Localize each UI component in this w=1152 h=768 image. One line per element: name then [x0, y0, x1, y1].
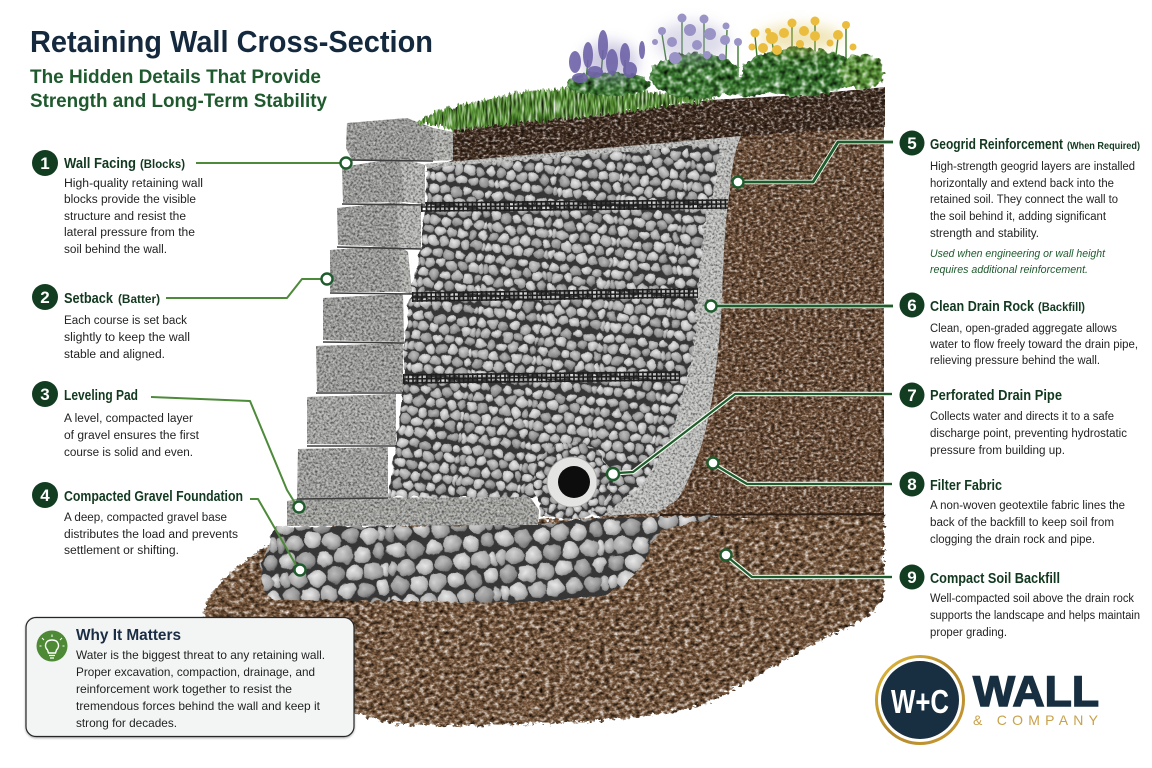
body text 1: structure and resist the — [64, 211, 186, 223]
body text 8: back of the backfill to keep soil from — [930, 517, 1114, 529]
heading 3: Leveling Pad — [64, 388, 138, 404]
number badge 8 — [900, 472, 924, 496]
body text 2 — [64, 315, 190, 361]
number badge 4 — [32, 482, 58, 508]
clean drain rock backfill — [388, 144, 720, 516]
panel body text: tremendous forces behind the wall and keep it — [76, 699, 321, 713]
subtitle: The Hidden Details That Provide — [30, 66, 321, 88]
body text 8: clogging the drain rock and pipe. — [930, 534, 1095, 546]
body text 2: stable and aligned. — [64, 349, 165, 361]
leader line 8 — [708, 458, 892, 484]
foliage — [566, 48, 884, 99]
leader line 3 — [151, 397, 304, 512]
callout 9: compact soil backfill — [720, 550, 1140, 639]
leader line 9 — [720, 550, 892, 577]
leader line 2 — [166, 274, 332, 298]
panel body text: reinforcement work together to resist the — [76, 682, 292, 696]
heading 2: Setback — [64, 291, 114, 307]
flowers: lavender blooms — [652, 14, 742, 64]
body text 6: Clean, open-graded aggregate allows — [930, 323, 1117, 335]
number badge 5: 5 — [907, 134, 917, 153]
subtitle: Strength and Long-Term Stability — [30, 90, 327, 112]
title: Retaining Wall Cross-Section — [30, 24, 433, 59]
geogrid layers — [403, 200, 728, 383]
panel heading: Why It Matters — [76, 627, 181, 644]
panel background — [26, 618, 354, 736]
heading 5: Geogrid Reinforcement — [930, 137, 1063, 153]
body text 6 — [929, 323, 1138, 367]
body text 5 — [930, 161, 1135, 240]
body text 9: supports the landscape and helps maintain — [930, 610, 1140, 622]
logo — [876, 656, 1099, 744]
heading 4: Compacted Gravel Foundation — [64, 489, 243, 505]
body text 1: blocks provide the visible — [64, 194, 196, 206]
subtitle — [30, 66, 327, 112]
drain rock around pipe — [533, 442, 611, 520]
callout 3: leveling pad — [32, 381, 304, 512]
number badge 6: 6 — [907, 296, 917, 315]
heading 1: (Blocks) — [140, 157, 185, 171]
callout 2: setback — [32, 274, 332, 361]
panel body text: Water is the biggest threat to any retaining wall. — [76, 648, 325, 662]
heading 6: (Backfill) — [1038, 300, 1085, 314]
body text 9: proper grading. — [930, 627, 1007, 639]
number badge 1: 1 — [40, 154, 50, 173]
heading 1: Wall Facing — [64, 156, 136, 172]
leader line 6 — [706, 300, 893, 312]
body text 7: Collects water and directs it to a safe — [930, 411, 1114, 423]
body text 4: settlement or shifting. — [64, 545, 179, 557]
body text 8 — [930, 500, 1125, 546]
panel body text: Proper excavation, compaction, drainage, and — [76, 665, 315, 679]
heading 2 — [64, 291, 160, 307]
body text 4 — [64, 512, 238, 557]
number badge 5 — [900, 130, 924, 156]
icon: light bulb — [36, 630, 68, 662]
flower stems — [585, 20, 846, 90]
leader line 7 — [607, 394, 892, 480]
number badge 6 — [900, 292, 924, 318]
number badge 8: 8 — [907, 475, 917, 494]
logo tagline: & COMPANY — [973, 712, 1099, 728]
leveling pad — [287, 497, 539, 526]
body text 3: of gravel ensures the first — [64, 430, 200, 442]
number badge 3: 3 — [40, 385, 50, 404]
wall facing blocks — [297, 118, 453, 499]
body text 8: A non-woven geotextile fabric lines the — [930, 500, 1125, 512]
number badge 1 — [32, 150, 58, 176]
heading 6: Clean Drain Rock — [930, 299, 1035, 315]
flower haze — [582, 22, 842, 82]
soil divider shadow — [660, 514, 884, 515]
body text 5: the soil behind it, adding significant — [930, 211, 1107, 223]
body text 3 — [64, 413, 200, 459]
body text 5: strength and stability. — [930, 228, 1039, 240]
callout 6: clean drain rock — [706, 292, 1138, 367]
number badge 2: 2 — [40, 288, 50, 307]
dark topsoil band — [425, 87, 885, 172]
body text 2: Each course is set back — [64, 315, 187, 327]
heading 8: Filter Fabric — [930, 478, 1002, 494]
number badge 9: 9 — [907, 568, 917, 587]
callout 4: gravel foundation — [32, 482, 306, 576]
number badge 9 — [900, 564, 924, 590]
italic note 5: Used when engineering or wall height — [930, 248, 1106, 260]
flowers: yellow blooms — [748, 16, 856, 55]
heading 7: Perforated Drain Pipe — [930, 388, 1062, 404]
leader line 4 — [250, 499, 306, 576]
leader line 5 — [732, 142, 893, 188]
callout 5: geogrid — [732, 130, 1140, 276]
callout 8: filter fabric — [708, 458, 1125, 546]
leader line 1 — [196, 158, 352, 168]
retained soil — [600, 118, 884, 520]
body text 6: relieving pressure behind the wall. — [930, 355, 1100, 367]
panel body text: strong for decades. — [76, 716, 177, 730]
number badge 2 — [32, 284, 58, 310]
logo wordmark: WALL — [973, 668, 1099, 716]
compact soil backfill layer — [204, 514, 884, 725]
italic note 5 — [930, 248, 1106, 276]
body text 4: distributes the load and prevents — [64, 529, 238, 541]
body text 7: discharge point, preventing hydrostatic — [930, 428, 1127, 440]
number badge 3 — [32, 381, 58, 407]
heading 1 — [64, 156, 185, 172]
block joints — [297, 160, 433, 499]
body text 1: lateral pressure from the — [64, 227, 195, 239]
panel: why it matters — [26, 618, 354, 736]
grass — [415, 88, 715, 130]
filter fabric — [425, 136, 741, 516]
heading 2: (Batter) — [118, 292, 160, 306]
flowers: purple salvia — [569, 30, 645, 83]
body text 1 — [64, 178, 203, 256]
body text 5: High-strength geogrid layers are installed — [930, 161, 1135, 173]
callout 7: drain pipe — [607, 382, 1127, 480]
number badge 7: 7 — [907, 386, 917, 405]
callout 1: wall facing — [32, 150, 352, 256]
body text 1: soil behind the wall. — [64, 244, 167, 256]
body text 1: High-quality retaining wall — [64, 178, 203, 190]
body text 7 — [930, 411, 1127, 457]
body text 3: A level, compacted layer — [64, 413, 193, 425]
number badge 7 — [900, 382, 924, 408]
number badge 4: 4 — [40, 486, 50, 505]
body text 9: Well-compacted soil above the drain rock — [930, 593, 1134, 605]
body text 2: slightly to keep the wall — [64, 332, 190, 344]
body text 5: retained soil. They connect the wall to — [930, 194, 1118, 206]
heading 9: Compact Soil Backfill — [930, 571, 1060, 587]
perforated drain pipe — [547, 457, 597, 507]
gravel foundation — [261, 516, 720, 602]
italic note 5: requires additional reinforcement. — [930, 264, 1088, 276]
panel body text — [76, 648, 325, 730]
body text 4: A deep, compacted gravel base — [64, 512, 227, 524]
body text 9 — [930, 593, 1140, 639]
body text 6: water to flow freely toward the drain pipe, — [929, 339, 1138, 351]
body text 5: horizontally and extend back into the — [930, 178, 1114, 190]
logo badge: W+C — [891, 683, 949, 720]
body text 3: course is solid and even. — [64, 447, 193, 459]
heading 5: (When Required) — [1067, 141, 1140, 152]
logo badge — [876, 656, 964, 744]
cross-section illustration — [204, 14, 885, 725]
body text 7: pressure from building up. — [930, 445, 1065, 457]
